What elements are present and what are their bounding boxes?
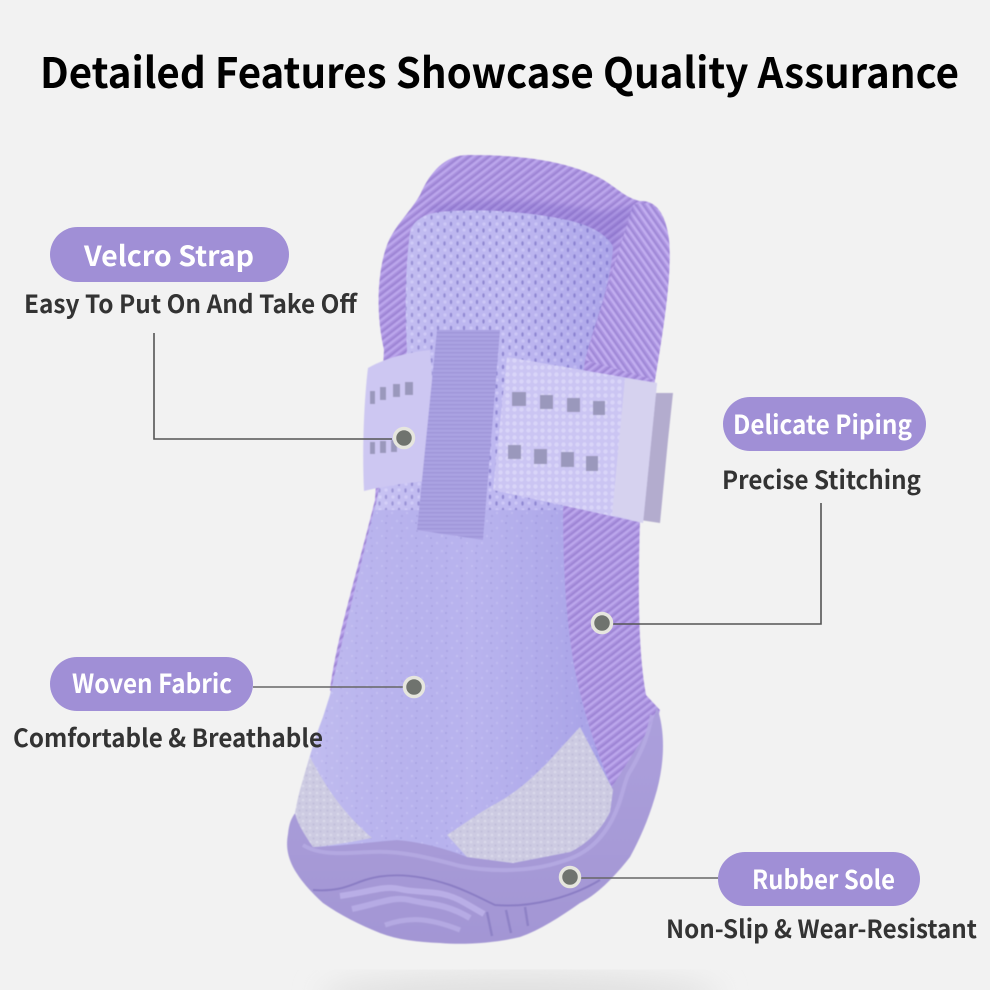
callout: rubber sole: Rubber Sole <box>752 860 895 897</box>
marker: velcro strap <box>394 428 414 448</box>
callout: woven fabric: Woven Fabric <box>72 664 232 701</box>
callout: rubber sole: Non-Slip & Wear-Resistant <box>666 910 977 946</box>
leader line: woven fabric <box>253 686 403 688</box>
collar fold shadow <box>425 200 636 340</box>
leader line: rubber sole <box>580 877 718 879</box>
callout: delicate piping <box>722 397 926 497</box>
boot collar and side piping <box>330 155 670 800</box>
callout: delicate piping: Delicate Piping <box>733 405 912 442</box>
marker: woven fabric <box>404 678 424 696</box>
illustration: purple dog boot <box>287 155 673 944</box>
grey toe patches <box>447 727 613 863</box>
woven fabric toe <box>295 505 613 863</box>
leader line: velcro strap <box>154 333 392 439</box>
leader line: delicate piping <box>613 503 821 624</box>
callout: velcro strap: Velcro Strap <box>83 235 254 275</box>
title: Detailed Features Showcase Quality Assurance <box>40 40 959 101</box>
callout: woven fabric <box>13 657 323 755</box>
callout: rubber sole <box>666 852 977 946</box>
marker: delicate piping <box>592 614 612 632</box>
strap tab <box>417 330 500 540</box>
callout: woven fabric: Comfortable & Breathable <box>13 719 323 755</box>
upper mesh panel <box>375 210 613 510</box>
sole tread <box>313 875 600 936</box>
callout: velcro strap <box>24 227 358 321</box>
sole <box>287 707 663 944</box>
callout: velcro strap: Easy To Put On And Take Off <box>24 285 358 321</box>
marker: rubber sole <box>560 868 580 886</box>
velcro strap <box>363 350 673 523</box>
sole inner ridge <box>303 715 652 870</box>
callout: delicate piping: Precise Stitching <box>722 461 921 497</box>
